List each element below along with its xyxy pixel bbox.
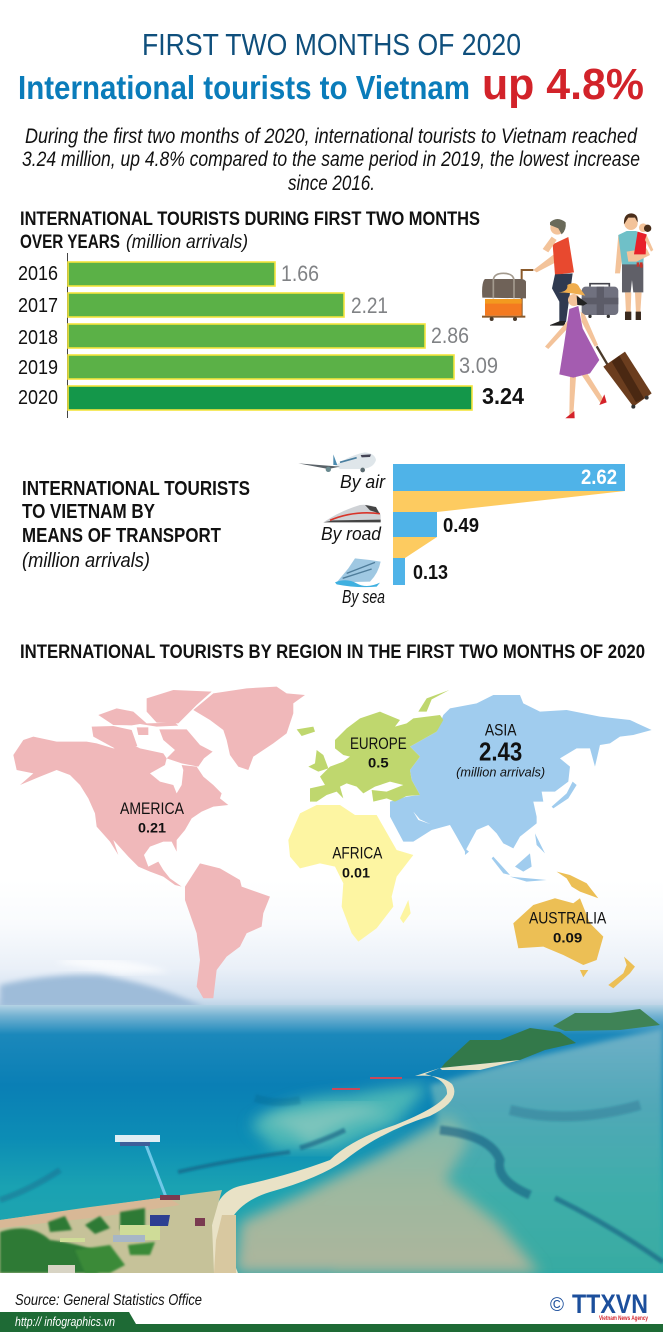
woman with suitcase	[545, 283, 652, 418]
bar 2018: 2018	[18, 327, 58, 349]
label Asia	[456, 721, 545, 780]
reef patches	[0, 1098, 663, 1262]
label Africa	[332, 843, 383, 880]
label America: 0.21	[138, 820, 166, 836]
bar by road: 0.49	[443, 515, 479, 537]
icon: plane	[298, 452, 376, 472]
boats	[332, 1078, 402, 1089]
bar by air	[393, 464, 625, 491]
label Asia: (million arrivals)	[456, 765, 545, 780]
funnel chart: transport	[393, 464, 625, 585]
heading: means of transport: (million arrivals)	[22, 550, 150, 572]
heading: tourists over years: INTERNATIONAL TOURISTS DURING FIRST TWO MONTHS	[20, 209, 480, 230]
photo: sea and island	[0, 958, 663, 1273]
heading: tourists over years	[20, 209, 480, 253]
subtitle: International tourists to Vietnam	[18, 69, 470, 106]
label Europe	[350, 734, 407, 770]
bar 2019	[18, 353, 498, 379]
url: http:// infographics.vn	[15, 1314, 115, 1329]
shallow water right	[428, 1026, 663, 1273]
label by air: By air	[340, 472, 386, 492]
bar 2017: 2017	[18, 295, 58, 317]
source: Source: General Statistics Office	[15, 1292, 202, 1309]
bar 2017	[18, 293, 388, 318]
heading: means of transport: INTERNATIONAL TOURISTS	[22, 478, 250, 500]
logo: TTXVN	[550, 1289, 649, 1322]
label by road: By road	[321, 524, 382, 544]
label Asia: ASIA	[485, 721, 517, 740]
subtitle: up 4.8%	[482, 60, 644, 109]
shallow sand water	[235, 1115, 540, 1273]
label Africa: AFRICA	[332, 843, 383, 862]
map: Asia	[390, 695, 652, 882]
heading: means of transport: MEANS OF TRANSPORT	[22, 525, 221, 547]
mountain in the distance	[0, 960, 200, 1005]
logo: TTXVN: Vietnam News Agency	[599, 1316, 649, 1322]
turquoise patch	[250, 1085, 430, 1150]
label America	[120, 799, 185, 836]
logo: TTXVN: ©	[550, 1295, 564, 1316]
bar chart: tourists by year	[18, 253, 524, 418]
bar by road	[393, 512, 479, 537]
bar 2019: 3.09	[459, 353, 498, 378]
bar 2020: 3.24	[482, 383, 524, 409]
label America: AMERICA	[120, 799, 185, 818]
label Asia: 2.43	[479, 737, 522, 767]
man with phone and trolley	[482, 219, 574, 326]
heading: tourists over years: OVER YEARS	[20, 232, 120, 253]
pier	[115, 1135, 166, 1197]
bar 2018: 2.86	[431, 323, 469, 348]
heading: means of transport	[22, 478, 250, 572]
map: Australia	[513, 872, 635, 988]
bar by sea: 0.13	[413, 562, 448, 584]
label Europe: 0.5	[368, 754, 389, 770]
subtitle	[18, 60, 644, 109]
bar 2017: 2.21	[351, 293, 388, 318]
map: America	[13, 687, 305, 998]
intro paragraph: since 2016.	[288, 172, 375, 195]
heading: means of transport: TO VIETNAM BY	[22, 501, 156, 523]
bar 2020	[18, 383, 524, 410]
illustration: travellers	[482, 213, 653, 418]
label Australia: AUSTRALIA	[529, 908, 607, 927]
logo: TTXVN: TTXVN	[572, 1289, 648, 1319]
map: Africa	[288, 805, 413, 942]
label Australia: 0.09	[553, 929, 583, 945]
bar 2019: 2019	[18, 357, 58, 379]
intro paragraph	[22, 125, 640, 195]
icon: train	[323, 505, 381, 522]
grey suitcase	[582, 284, 618, 318]
islands	[440, 1009, 660, 1070]
footer band	[0, 1312, 663, 1332]
label Africa: 0.01	[342, 864, 370, 880]
background sky fade	[0, 880, 663, 1006]
bar 2016: 1.66	[281, 261, 319, 286]
title: FIRST TWO MONTHS OF 2020	[142, 27, 521, 62]
label Europe: EUROPE	[350, 734, 407, 753]
bar 2016	[18, 261, 319, 286]
sand bar	[212, 1068, 454, 1273]
map: Europe	[297, 690, 449, 802]
bar by sea	[393, 558, 448, 585]
father and child	[615, 213, 653, 320]
bar by air: 2.62	[581, 466, 617, 489]
coastal land	[0, 1190, 236, 1273]
icon: ship	[335, 558, 381, 587]
label Australia	[529, 908, 607, 945]
bar 2016: 2016	[18, 263, 58, 285]
label by sea: By sea	[342, 587, 385, 607]
heading: tourists over years: (million arrivals)	[126, 232, 248, 253]
bar 2020: 2020	[18, 387, 58, 409]
bar 2018	[18, 323, 469, 349]
